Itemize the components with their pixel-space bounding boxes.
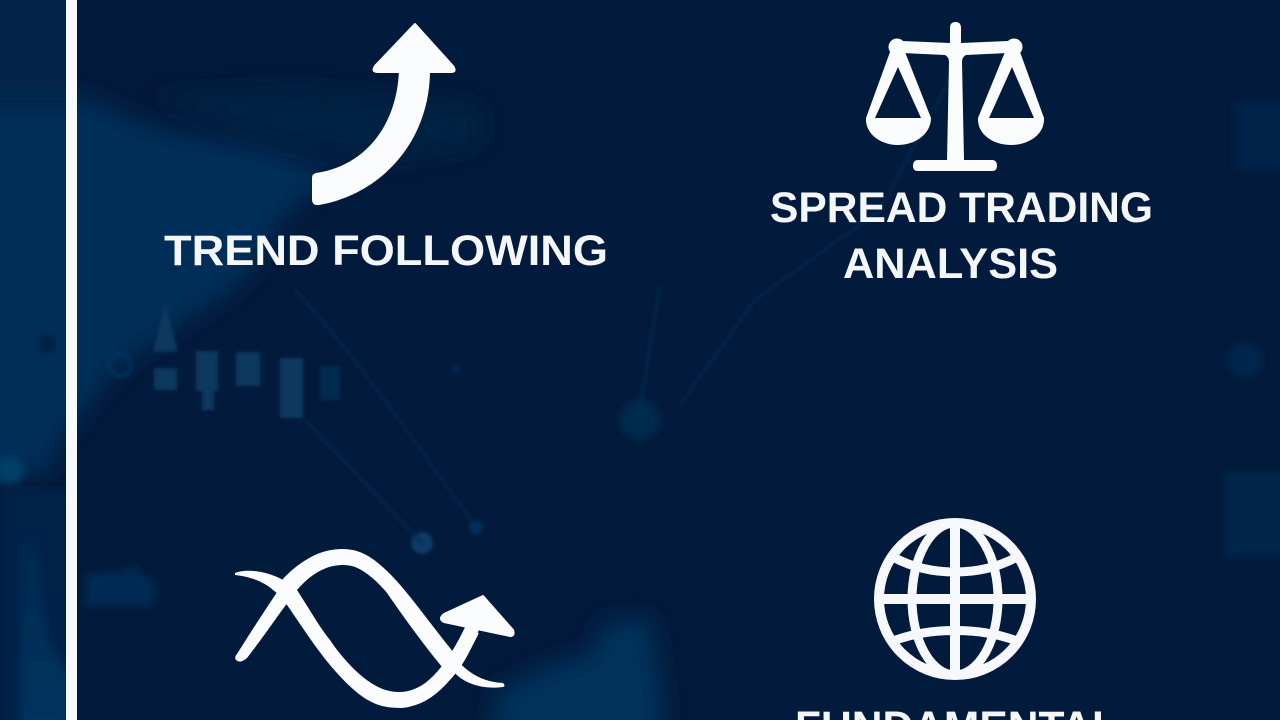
heading: spread trading analysis: [770, 184, 1153, 288]
vertical divider line: [66, 0, 77, 720]
icon: crossing waves with arrow: [235, 549, 514, 708]
item: wave strategy: [235, 549, 514, 708]
icon: balance scales: [866, 22, 1044, 171]
heading: spread trading analysis: ANALYSIS: [843, 240, 1058, 288]
item: trend following: [164, 24, 608, 275]
heading: trend following: TREND FOLLOWING: [164, 227, 608, 275]
icon: globe: [879, 523, 1031, 675]
icon: curved up arrow: [312, 24, 455, 205]
heading: spread trading analysis: SPREAD TRADING: [770, 184, 1153, 232]
item: spread trading analysis: [770, 22, 1153, 288]
item: fundamental: [795, 523, 1118, 720]
background candles: [153, 300, 340, 418]
